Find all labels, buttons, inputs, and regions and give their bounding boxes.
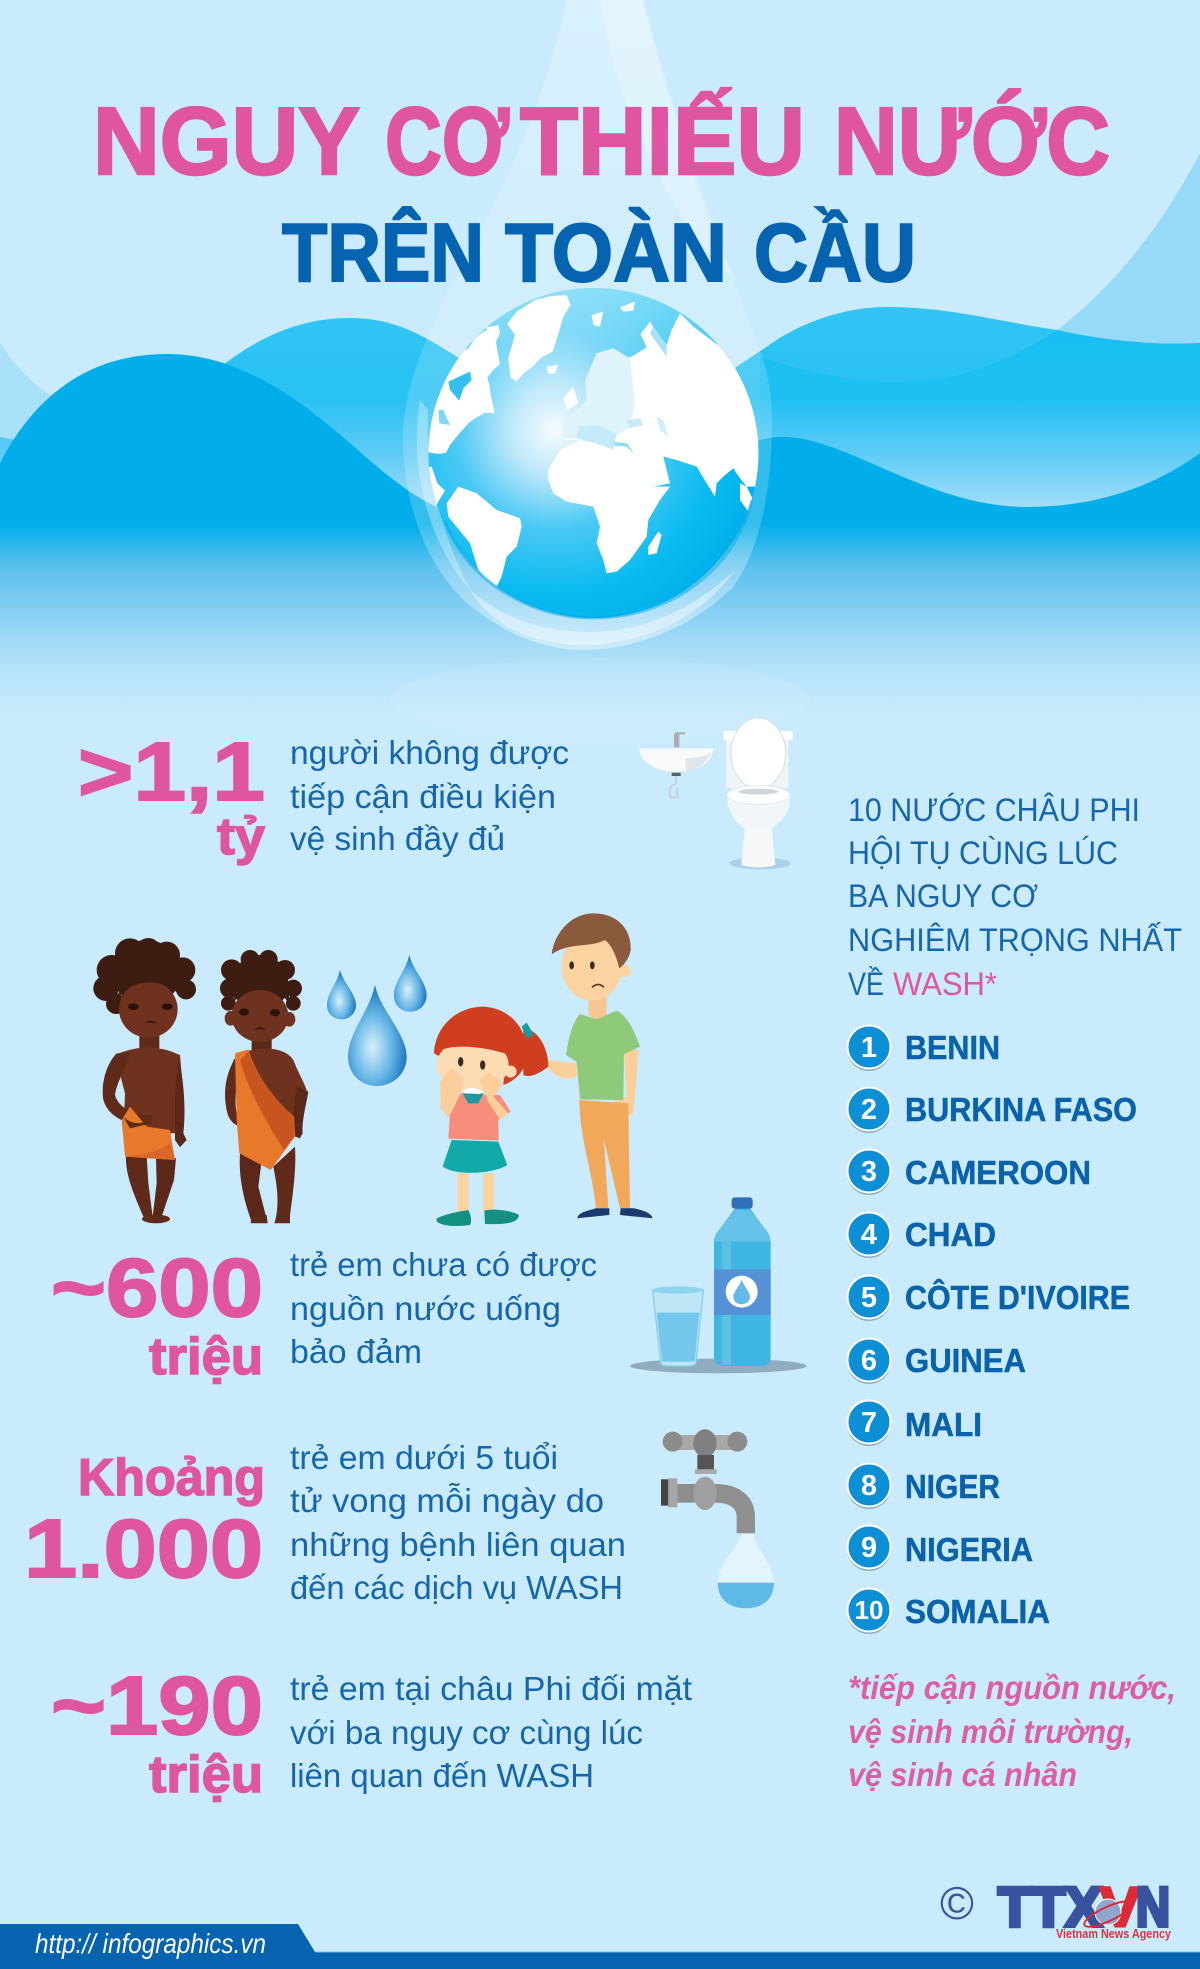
unit: triệu [149,1328,263,1386]
stat: 600 million [51,1241,597,1386]
panel: ten African countries heading: VỀ [848,966,884,1002]
background waves [0,153,1200,742]
panel: ten African countries heading: HỘI TỤ CÙNG LÚC [848,835,1118,871]
item 3: 3 [861,1156,877,1188]
title [93,87,1110,195]
description: liên quan đến WASH [290,1757,594,1794]
item 6: GUINEA [905,1342,1026,1379]
item 6: 6 [861,1345,877,1377]
logo: TTXVN: V [1100,1875,1140,1938]
item 5: 5 [861,1282,877,1314]
item 10: 10 [855,1595,883,1625]
item 2: BURKINA FASO [905,1091,1137,1128]
subtitle: TRÊN [282,206,484,299]
item 9: 9 [861,1532,877,1564]
item 9: NIGERIA [905,1531,1033,1568]
item 6 [847,1338,1026,1384]
globe [413,288,767,618]
panel: ten African countries heading [848,792,1182,1002]
description: tiếp cận điều kiện [290,778,556,815]
stat: 190 million [51,1659,692,1804]
title: CƠ [385,88,509,195]
title: NƯỚC [834,88,1110,195]
illustration: two African boys [93,938,308,1223]
boy one [93,938,196,1223]
description: trẻ em dưới 5 tuổi [290,1439,558,1476]
description: những bệnh liên quan [290,1526,626,1563]
stat: 1,1 billion [78,725,569,866]
icon: water drops [327,955,427,1086]
boy two [220,950,308,1223]
subtitle: TOÀN [505,206,727,299]
subtitle: CẦU [754,206,916,299]
item 2: 2 [861,1094,877,1126]
description: người không được [290,734,569,771]
logo: TTXVN [940,1875,1172,1941]
item 3 [847,1150,1091,1195]
item 10 [847,1588,1050,1634]
label: Khoảng [78,1449,265,1507]
description: trẻ em chưa có được [290,1246,597,1283]
stat: about 1,000 [24,1439,626,1606]
description [290,734,569,857]
description: nguồn nước uống [290,1290,561,1327]
item 2 [847,1088,1137,1133]
footnote: vệ sinh môi trường, [848,1713,1133,1750]
description: bảo đảm [290,1333,422,1370]
item 5: CÔTE D'IVOIRE [905,1278,1130,1316]
description: với ba nguy cơ cùng lúc [290,1714,643,1751]
description: đến các dịch vụ WASH [290,1569,623,1606]
description [290,1246,597,1370]
footnote: vệ sinh cá nhân [848,1756,1077,1793]
item 4: CHAD [905,1216,996,1253]
number: >1,1 [78,725,265,818]
website url: http:// infographics.vn [35,1928,266,1959]
icon: faucet with drop [661,1429,774,1608]
item 8 [847,1464,1000,1509]
item 1: 1 [861,1032,877,1064]
item 10: SOMALIA [905,1593,1050,1630]
item 7: MALI [905,1406,982,1443]
girl [434,1007,548,1226]
description [290,1439,626,1606]
subtitle [282,206,916,299]
description: trẻ em tại châu Phi đối mặt [290,1670,692,1707]
item 5 [847,1276,1130,1321]
item 7 [847,1400,982,1446]
item 9 [847,1526,1033,1571]
panel: ten African countries heading: BA NGUY CƠ [848,878,1038,914]
list: ten countries [847,1026,1137,1634]
item 8: 8 [861,1470,877,1502]
unit: triệu [149,1746,263,1804]
logo: TTXVN: Vietnam News Agency [1056,1926,1172,1941]
item 4: 4 [861,1219,877,1251]
item 4 [847,1212,996,1258]
icon: water bottle and glass [630,1197,807,1373]
item 1 [847,1026,1000,1071]
logo: TTXVN: © [940,1877,974,1929]
item 3: CAMEROON [905,1154,1091,1191]
item 1: BENIN [905,1029,1000,1066]
footnote [848,1669,1176,1793]
number: ~600 [51,1241,263,1334]
footer bar [0,1924,1200,1969]
item 7: 7 [861,1407,877,1439]
panel: ten African countries heading: WASH* [893,966,997,1002]
logo: TTXVN: N [1136,1875,1170,1938]
father [545,913,653,1218]
illustration: sad girl and father [434,913,653,1226]
icon: sink and toilet [639,718,793,869]
number: 1.000 [24,1502,263,1595]
number: ~190 [51,1659,263,1752]
description: tử vong mỗi ngày do [290,1482,604,1519]
logo: TTXVN: TTX [998,1875,1102,1938]
panel: ten African countries heading: 10 NƯỚC CHÂU PHI [848,792,1140,828]
water drop [403,0,772,650]
item 8: NIGER [905,1468,1000,1505]
title: NGUY [93,88,360,195]
footnote: *tiếp cận nguồn nước, [848,1669,1176,1706]
title: THIẾU [520,87,805,195]
description [290,1670,692,1794]
unit: tỷ [217,808,265,866]
panel: ten African countries heading: NGHIÊM TRỌNG NHẤT [848,922,1182,958]
description: vệ sinh đầy đủ [290,820,505,857]
